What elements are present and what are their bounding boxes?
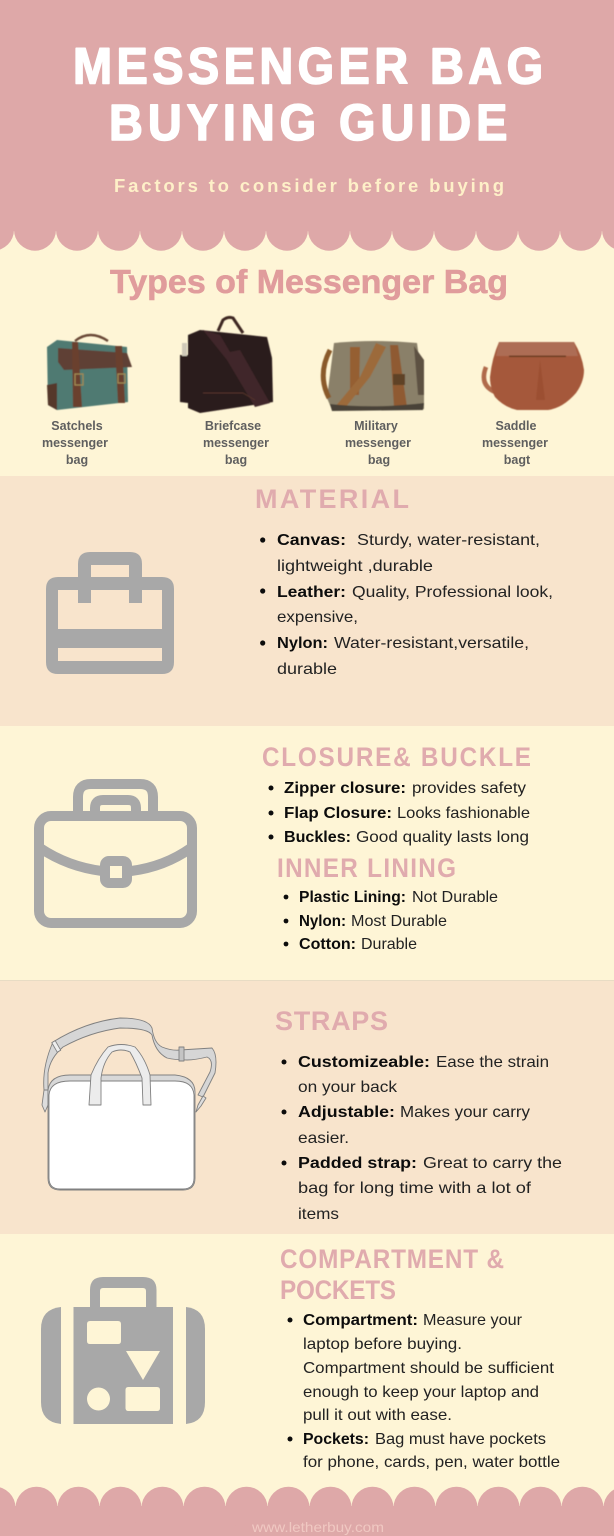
text: material list: Water-resistant,versatile, xyxy=(334,635,529,652)
text: compartment list xyxy=(288,1312,560,1471)
image: military bag xyxy=(323,341,424,411)
text: compartment list: for phone, cards, pen, water bottle xyxy=(303,1454,560,1471)
text: closure list: Flap Closure: xyxy=(284,805,392,822)
panel: footer xyxy=(0,1487,614,1536)
label: satchels: Satchels xyxy=(51,419,103,433)
text: closure list: provides safety xyxy=(412,780,526,797)
panel: bag types xyxy=(42,317,584,467)
text: closure list: Looks fashionable xyxy=(397,805,530,822)
text: material list: Canvas: xyxy=(277,532,346,549)
heading: compartment and pockets: POCKETS xyxy=(280,1276,396,1305)
text: straps list: Ease the strain xyxy=(436,1054,549,1071)
text: material list: Nylon: xyxy=(277,635,328,652)
text: material list: lightweight ,durable xyxy=(277,558,433,575)
image: satchel bag xyxy=(47,335,132,410)
label: military: Military xyxy=(354,419,398,433)
panel: material xyxy=(0,476,614,726)
image: laptop bag with strap xyxy=(42,1018,216,1190)
text: lining list: Cotton: xyxy=(299,936,356,953)
label: briefcase: bag xyxy=(225,453,247,467)
panel: straps xyxy=(0,981,614,1234)
text: closure list xyxy=(268,780,530,846)
icon: suitcase xyxy=(41,1277,205,1424)
text: compartment list: Measure your xyxy=(423,1312,523,1329)
icon: material bag xyxy=(46,552,174,674)
panel: header banner xyxy=(0,0,614,251)
text: material list: durable xyxy=(277,661,337,678)
text: material list: expensive, xyxy=(277,609,358,626)
image: saddle bag xyxy=(484,342,584,410)
label: satchels: messenger xyxy=(42,436,108,450)
text: compartment list: Compartment should be sufficient xyxy=(303,1360,555,1377)
panel: closure and lining xyxy=(0,726,614,981)
text: straps list: Great to carry the xyxy=(423,1155,562,1172)
heading: closure and buckle: CLOSURE& BUCKLE xyxy=(262,743,531,772)
text: lining list: Durable xyxy=(361,936,417,953)
text: lining list: Plastic Lining: xyxy=(299,889,406,906)
text: lining list: Nylon: xyxy=(299,913,346,930)
heading: compartment and pockets xyxy=(280,1245,504,1305)
label: satchels: bag xyxy=(66,453,88,467)
text: straps list: Adjustable: xyxy=(298,1104,395,1121)
title: MESSENGER BAG xyxy=(73,39,543,95)
panel: compartment and pockets xyxy=(0,1234,614,1490)
label: saddle: bagt xyxy=(504,453,531,467)
heading: inner lining: INNER LINING xyxy=(277,854,456,883)
heading: types of messenger bag: Types of Messenger Bag xyxy=(110,263,508,300)
text: straps list: Customizeable: xyxy=(298,1054,430,1071)
subtitle: Factors to consider before buying xyxy=(114,175,504,196)
text: straps list: on your back xyxy=(298,1079,398,1096)
icon: briefcase xyxy=(39,784,192,923)
label: saddle: Saddle xyxy=(496,419,537,433)
label: briefcase: messenger xyxy=(203,436,269,450)
text: material list: Leather: xyxy=(277,584,346,601)
text: straps list: Makes your carry xyxy=(400,1104,530,1121)
text: compartment list: enough to keep your laptop and xyxy=(303,1384,539,1401)
text: compartment list: Pockets: xyxy=(303,1431,369,1448)
text: lining list: Most Durable xyxy=(351,913,447,930)
title xyxy=(73,39,543,151)
text: lining list xyxy=(284,889,498,953)
label: military: bag xyxy=(368,453,390,467)
text: closure list: Buckles: xyxy=(284,829,351,846)
label: military: messenger xyxy=(345,436,411,450)
text: material list: Quality, Professional look, xyxy=(352,584,553,601)
text: closure list: Zipper closure: xyxy=(284,780,406,797)
text: website: www.letherbuy.com xyxy=(251,1519,384,1535)
image: briefcase bag xyxy=(180,317,273,413)
text: straps list: Padded strap: xyxy=(298,1155,417,1172)
text: compartment list: Compartment: xyxy=(303,1312,418,1329)
text: straps list xyxy=(282,1054,562,1223)
title: BUYING GUIDE xyxy=(109,95,507,151)
text: compartment list: laptop before buying. xyxy=(303,1336,462,1353)
text: closure list: Good quality lasts long xyxy=(356,829,529,846)
heading: compartment and pockets: COMPARTMENT & xyxy=(280,1245,504,1274)
label: saddle: messenger xyxy=(482,436,548,450)
text: material list: Sturdy, water-resistant, xyxy=(357,532,540,549)
text: compartment list: pull it out with ease. xyxy=(303,1407,452,1424)
text: straps list: easier. xyxy=(298,1130,349,1147)
heading: material: MATERIAL xyxy=(255,484,409,514)
text: straps list: items xyxy=(298,1206,339,1223)
text: straps list: bag for long time with a lot of xyxy=(298,1180,532,1197)
heading: straps: STRAPS xyxy=(275,1006,388,1036)
text: lining list: Not Durable xyxy=(412,889,498,906)
text: compartment list: Bag must have pockets xyxy=(375,1431,546,1448)
label: briefcase: Briefcase xyxy=(205,419,261,433)
text: material list xyxy=(260,532,553,678)
